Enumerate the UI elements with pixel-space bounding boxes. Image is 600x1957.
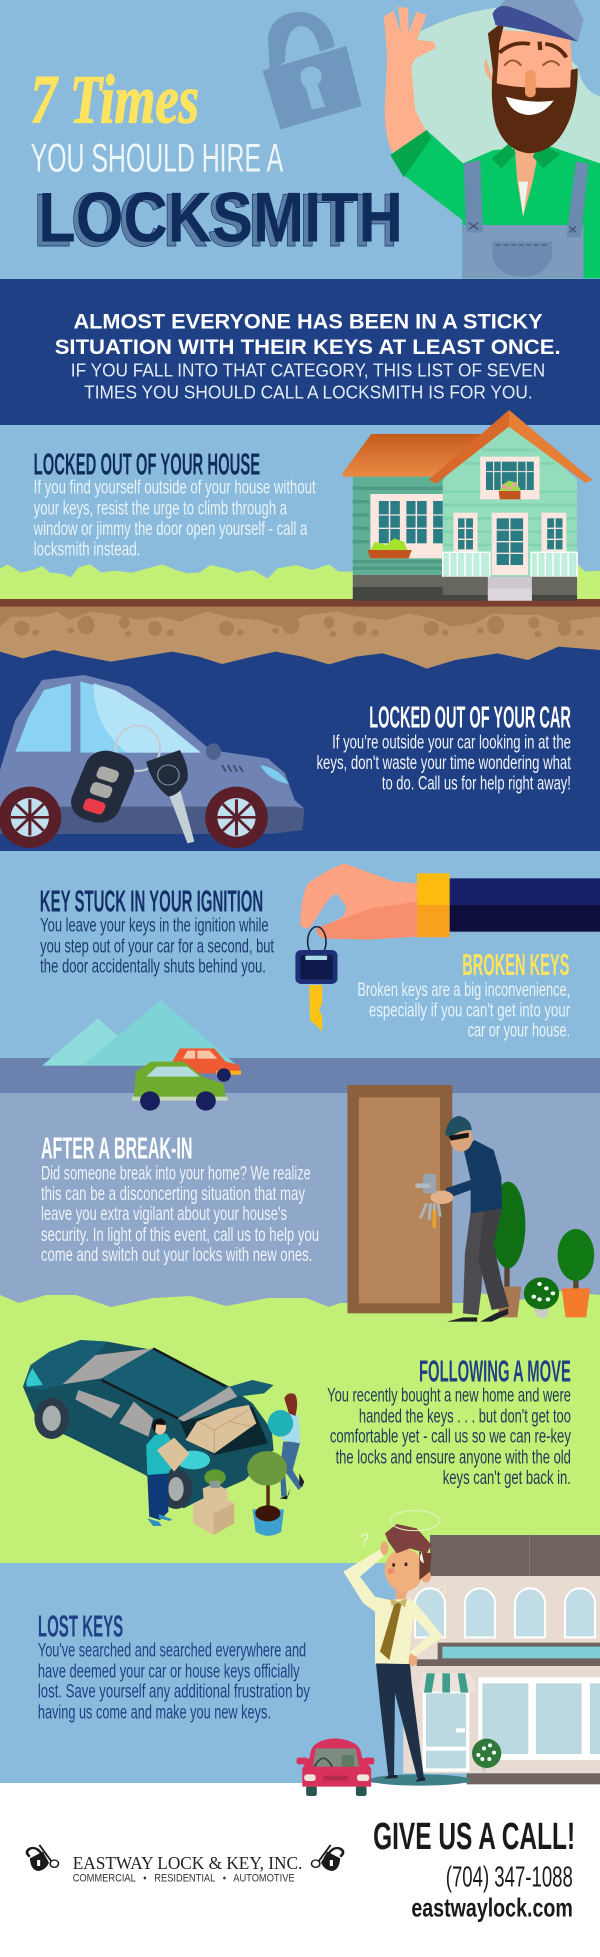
key blade	[168, 788, 194, 843]
panel: intro band	[0, 279, 600, 425]
hood	[24, 1340, 107, 1390]
ears	[484, 58, 575, 90]
side windows	[75, 1390, 153, 1437]
text: after a break-in: this can be a disconcerting situation that may	[41, 1183, 305, 1205]
lower windows and door frames	[453, 513, 566, 575]
text: after a break-in: come and switch out your locks with new ones.	[41, 1244, 312, 1266]
hand shade	[317, 902, 417, 939]
mask	[448, 1133, 469, 1141]
left window bars	[379, 501, 443, 543]
logo: left lock and key icon	[27, 1845, 59, 1871]
icon: padlock	[262, 12, 362, 129]
left window frame	[370, 494, 443, 558]
shop plant flowers	[476, 1743, 496, 1761]
illustration: red car	[172, 1048, 241, 1082]
face	[492, 30, 574, 100]
right leg	[478, 1208, 509, 1310]
string	[308, 927, 326, 957]
right wing wall	[443, 415, 577, 577]
headlight	[260, 765, 289, 784]
body	[23, 1340, 274, 1508]
illustration: mountains	[42, 1000, 237, 1066]
illustration: burglar	[415, 1116, 509, 1322]
text: after a break-in	[41, 1131, 319, 1266]
heels	[279, 1473, 304, 1499]
ledge	[417, 1659, 600, 1666]
shirt	[146, 1433, 180, 1475]
upper window frame	[480, 457, 540, 499]
illustration: hand holding key	[295, 863, 600, 1032]
panel: break-in background	[0, 1093, 600, 1313]
shop and confused man group	[343, 1511, 600, 1786]
left wing wall	[353, 475, 445, 575]
side hair	[419, 1552, 432, 1580]
hand	[430, 1191, 453, 1204]
keys	[420, 1203, 440, 1228]
shop plant	[472, 1739, 501, 1768]
top	[281, 1413, 300, 1443]
foundation	[443, 577, 577, 595]
dizzy halo	[390, 1511, 440, 1531]
face	[385, 1549, 423, 1591]
nose	[525, 70, 536, 97]
hand on hip	[408, 1654, 417, 1666]
roof	[101, 1348, 230, 1418]
intro text	[55, 309, 561, 403]
rear spokes	[11, 799, 49, 835]
eyes	[504, 60, 559, 66]
text: lost keys: lost. Save yourself any additional frustration by	[38, 1681, 310, 1702]
face	[450, 1125, 473, 1152]
reflector	[176, 1451, 210, 1469]
ignition, broken keys, break-in group	[40, 863, 600, 1322]
fob slot	[305, 956, 327, 960]
upper window bars	[486, 462, 534, 490]
hair	[284, 1393, 297, 1416]
logo: tagline: COMMERCIAL • RESIDENTIAL • AUTOMOTIVE	[73, 1873, 295, 1884]
vents	[222, 765, 243, 772]
illustration: blue car	[0, 675, 304, 848]
roof seam	[528, 1535, 531, 1576]
left wing foundation	[353, 575, 445, 587]
box edges	[199, 1410, 253, 1453]
left window glass	[379, 501, 443, 543]
head	[154, 1420, 166, 1435]
roof rails	[101, 1348, 226, 1418]
intro text: ALMOST EVERYONE HAS BEEN IN A STICKY	[73, 309, 543, 333]
illustration: potted tree two	[558, 1229, 594, 1317]
steps	[488, 577, 532, 601]
text: key stuck in your ignition: you step out of your car for a second, but	[40, 936, 274, 957]
boxes	[186, 1405, 256, 1453]
sweat drop	[420, 1552, 424, 1563]
cuff	[417, 873, 450, 905]
vase	[268, 1410, 293, 1437]
text: lost keys	[38, 1610, 310, 1723]
text: locked out of your house: If you find yourself outside of your house without	[34, 477, 316, 498]
rear hub	[11, 798, 49, 837]
text: after a break-in: leave you extra vigilant about your house's	[41, 1203, 287, 1225]
sign frame	[438, 1643, 600, 1660]
text: after a break-in: Did someone break into your home? We realize	[41, 1163, 311, 1184]
logo: company name: EASTWAY LOCK & KEY, INC.	[73, 1854, 302, 1874]
navy wave edge	[0, 647, 600, 683]
question mark: ?	[360, 1530, 369, 1549]
logo: right lock and key icon	[311, 1845, 343, 1871]
flowers	[499, 481, 521, 491]
key head	[146, 750, 188, 797]
sleeve shade	[450, 905, 600, 932]
soil pattern	[0, 607, 600, 637]
upper wall	[403, 1576, 600, 1773]
door frame	[423, 1692, 469, 1772]
beanie	[445, 1116, 472, 1137]
tie	[380, 1602, 402, 1660]
windows	[415, 1588, 595, 1637]
window glare	[94, 683, 201, 753]
right strap	[566, 162, 589, 237]
roof	[430, 1535, 600, 1576]
main roof	[429, 410, 592, 483]
key head ring	[158, 765, 179, 785]
bush	[370, 538, 408, 550]
mint blob	[398, 7, 600, 173]
awning stripes	[424, 1673, 468, 1693]
planter	[367, 550, 412, 558]
main roof right side	[509, 410, 592, 483]
text: key stuck in your ignition: You leave your keys in the ignition while	[40, 915, 269, 936]
left strap	[464, 160, 483, 232]
text: after a break-in: security. In light of this event, call us to help you	[41, 1224, 319, 1246]
following a move group	[23, 1340, 571, 1723]
panel: road band	[0, 1058, 600, 1093]
text: after a break-in: AFTER A BREAK-IN	[41, 1131, 192, 1166]
shirt and arms	[343, 1548, 443, 1664]
torso	[446, 1140, 502, 1213]
illustration: red car	[297, 1738, 374, 1796]
step line	[488, 589, 532, 601]
lock plate	[423, 1174, 436, 1193]
front hub	[217, 798, 256, 837]
legs	[280, 1442, 302, 1497]
pavement	[467, 1773, 600, 1784]
glass bars	[458, 518, 562, 565]
illustration: house	[342, 410, 592, 601]
header illustration group	[31, 0, 600, 403]
lower body	[0, 807, 304, 834]
door handle	[456, 1728, 465, 1732]
pocket stitching	[496, 243, 549, 246]
heading: locksmith: LOCKSMITH	[38, 178, 403, 257]
ignition, broken keys, break-in group: KEY STUCK IN YOUR IGNITION	[40, 885, 263, 919]
rear hub	[168, 1477, 184, 1501]
grass	[0, 564, 600, 600]
railing bars	[450, 552, 568, 577]
illustration: stacked boxes with plant	[193, 1469, 234, 1535]
rear wheel	[160, 1469, 192, 1509]
illustration: man carrying box	[146, 1418, 189, 1526]
pants	[147, 1470, 168, 1520]
body	[0, 675, 304, 834]
shoes	[384, 1775, 425, 1782]
key fob	[65, 745, 140, 828]
stitches	[469, 223, 576, 232]
illustration: confused man	[343, 1524, 443, 1782]
illustration: teal car	[23, 1340, 274, 1509]
trousers	[376, 1663, 424, 1778]
gold key	[430, 1210, 439, 1228]
shop plant pot	[481, 1765, 489, 1773]
undershirt	[518, 182, 528, 217]
text: lost keys: having us come and make you new keys.	[38, 1702, 271, 1723]
foundation base	[443, 595, 577, 601]
panel: following a move background	[0, 1291, 600, 1563]
second question mark: ?	[437, 1582, 447, 1601]
shadow under man	[369, 1774, 471, 1786]
rear wheel	[0, 787, 61, 848]
text: following a move	[327, 1355, 571, 1489]
text: locked out of your car	[316, 701, 571, 794]
flower blossoms	[502, 483, 517, 490]
text: locked out of your house	[33, 447, 316, 560]
front wheel	[34, 1398, 69, 1439]
shoes	[447, 1308, 508, 1322]
brows	[499, 42, 566, 57]
neck and undershirt	[515, 147, 540, 217]
sleeve cuff	[390, 130, 431, 177]
text: locked out of your house: LOCKED OUT OF YOUR HOUSE	[34, 447, 260, 482]
panel: lost keys background	[0, 1563, 600, 1783]
heading: you should hire a: YOU SHOULD HIRE A	[31, 136, 283, 181]
house and car group	[0, 410, 600, 848]
text: lost keys: have deemed your car or house keys officially	[38, 1661, 300, 1682]
illustration: potted tree one	[491, 1182, 525, 1317]
illustration: green car	[132, 1062, 228, 1111]
rear window	[15, 683, 71, 752]
trunk interior	[180, 1407, 268, 1455]
shirt	[390, 130, 600, 278]
text: key stuck in your ignition: the door accidentally shuts behind you.	[40, 956, 266, 977]
porch railings	[443, 552, 577, 577]
text: locked out of your house: window or jimmy the door open yourself - call a	[33, 518, 307, 540]
footer group	[27, 1738, 575, 1922]
collar	[492, 143, 561, 168]
front spokes	[217, 799, 256, 835]
fob inner	[300, 955, 333, 979]
soil	[0, 607, 600, 673]
shop window panes	[482, 1683, 600, 1754]
key blade	[309, 985, 322, 1032]
heading: locksmith shadow: LOCKSMITH	[34, 179, 398, 263]
pocket	[492, 242, 552, 277]
illustration: door	[347, 1085, 452, 1313]
shop window frame	[478, 1677, 600, 1760]
text: key stuck in your ignition	[40, 885, 274, 977]
collar	[390, 1598, 407, 1607]
lower windows and door glass	[458, 518, 562, 565]
visor	[492, 6, 578, 42]
hair	[385, 1524, 432, 1553]
front window	[80, 682, 201, 753]
hatch lid	[230, 1380, 274, 1397]
sleeve	[450, 878, 600, 905]
awning	[417, 1673, 477, 1692]
illustration: flowering bush	[524, 1277, 559, 1318]
mirror	[206, 743, 221, 760]
panel: car section background	[0, 640, 600, 851]
hand	[300, 863, 417, 939]
beard	[488, 20, 578, 153]
key ring	[116, 726, 160, 771]
shoes	[147, 1514, 172, 1526]
hand on head	[380, 1542, 388, 1555]
text: lost keys: LOST KEYS	[38, 1610, 123, 1644]
panel: house section background	[0, 425, 600, 600]
arm and hand	[384, 7, 435, 167]
right wing siding	[443, 450, 577, 545]
front hub	[42, 1406, 61, 1431]
flower box	[499, 491, 520, 499]
box	[157, 1438, 189, 1472]
left wing siding	[353, 488, 444, 568]
hatch glass	[178, 1382, 253, 1422]
illustration: smiling locksmith	[384, 0, 600, 278]
illustration: potted round tree	[247, 1451, 287, 1536]
hair	[152, 1418, 165, 1433]
text: broken keys	[357, 948, 570, 1041]
ear	[421, 1571, 431, 1583]
mouth	[506, 97, 554, 115]
left roof	[342, 434, 483, 477]
cap	[494, 0, 584, 42]
overalls	[462, 225, 584, 278]
illustration: storefront	[369, 1535, 600, 1786]
door panes	[426, 1693, 466, 1768]
eyes	[392, 1563, 407, 1567]
left leg	[463, 1210, 486, 1315]
topsoil strip	[0, 599, 600, 607]
neck	[395, 1587, 408, 1599]
illustration: woman with vase	[268, 1393, 304, 1499]
text: locked out of your house: locksmith instead.	[34, 539, 140, 560]
front wheel	[205, 787, 268, 848]
upper window glass	[486, 462, 534, 490]
panel: header background	[0, 0, 600, 279]
heading: 7 Times: 7 Times	[31, 61, 199, 138]
text: lost keys: You've searched and searched everywhere and	[38, 1640, 306, 1661]
key fob	[295, 950, 337, 984]
sign	[442, 1647, 600, 1658]
cuff shade	[417, 905, 450, 937]
front lamp	[26, 1368, 43, 1387]
text: locked out of your house: your keys, resist the urge to climb through a	[34, 498, 287, 519]
panel: ignition and broken keys background	[0, 851, 600, 1058]
left wing base	[353, 587, 445, 601]
cheek	[387, 1568, 395, 1574]
roof glass	[62, 1348, 153, 1384]
door handle	[415, 1183, 430, 1188]
intro text: SITUATION WITH THEIR KEYS AT LEAST ONCE.	[55, 334, 561, 359]
